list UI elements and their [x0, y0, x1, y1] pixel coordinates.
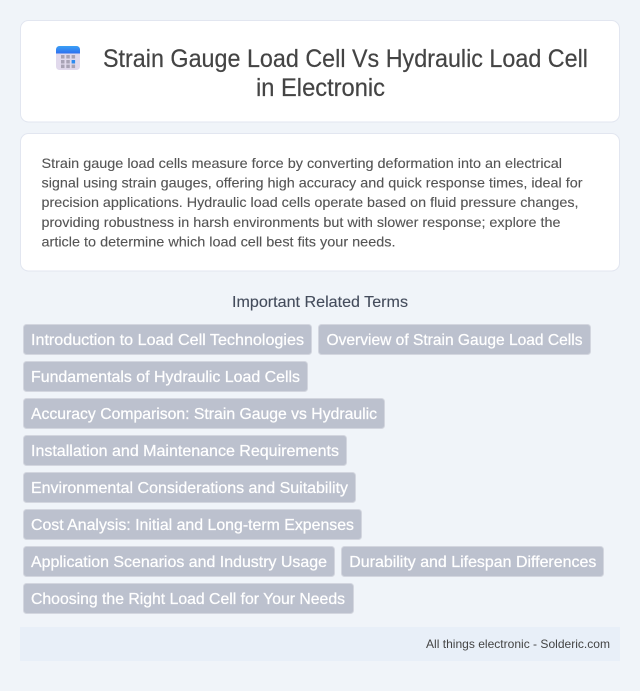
tag: overview: Overview of Strain Gauge Load Cells [326, 332, 582, 349]
text block: summary: signal using strain gauges, offering high accuracy and quick response times, ideal for [42, 175, 583, 191]
tag: durability: Durability and Lifespan Differences [349, 554, 596, 571]
tag: introduction: Introduction to Load Cell Technologies [31, 332, 304, 349]
tag: environmental [24, 472, 356, 502]
title [103, 45, 588, 102]
tag: environmental: Environmental Considerations and Suitability [31, 480, 348, 497]
panel: related term tags [24, 324, 604, 614]
footer: All things electronic - Solderic.com [426, 637, 610, 651]
tag: cost: Cost Analysis: Initial and Long-term Expenses [31, 517, 354, 534]
tag: fundamentals: Fundamentals of Hydraulic Load Cells [31, 369, 300, 386]
tag: choosing: Choosing the Right Load Cell for Your Needs [31, 591, 345, 608]
tag: introduction [24, 324, 312, 354]
tag: application [24, 546, 334, 576]
tag: overview [318, 324, 590, 354]
panel: title card [20, 20, 620, 122]
text block: summary: providing robustness in harsh environments but with slower response; explore the [42, 214, 561, 230]
icon: calendar [56, 46, 80, 70]
panel: summary card [20, 134, 620, 271]
title: Strain Gauge Load Cell Vs Hydraulic Load Cell [103, 45, 588, 73]
tag: installation [24, 436, 346, 466]
tag: accuracy: Accuracy Comparison: Strain Gauge vs Hydraulic [31, 406, 377, 423]
footer [20, 627, 620, 661]
text block: summary: article to determine which load cell best fits your needs. [42, 233, 396, 249]
tag: installation: Installation and Maintenance Requirements [31, 443, 339, 460]
tag: application: Application Scenarios and Industry Usage [31, 554, 327, 571]
text block: summary [42, 155, 583, 249]
text block: summary: Strain gauge load cells measure force by converting deformation into an electrical [42, 155, 562, 171]
text block: summary: precision applications. Hydraulic load cells operate based on fluid pressure changes, [42, 194, 578, 210]
tag: fundamentals [24, 362, 308, 392]
tag: cost [24, 510, 362, 540]
heading: important related terms: Important Related Terms [232, 294, 408, 311]
tag: choosing [24, 584, 354, 614]
title: in Electronic [256, 74, 385, 102]
tag: accuracy [24, 398, 384, 428]
tag: durability [342, 546, 604, 576]
